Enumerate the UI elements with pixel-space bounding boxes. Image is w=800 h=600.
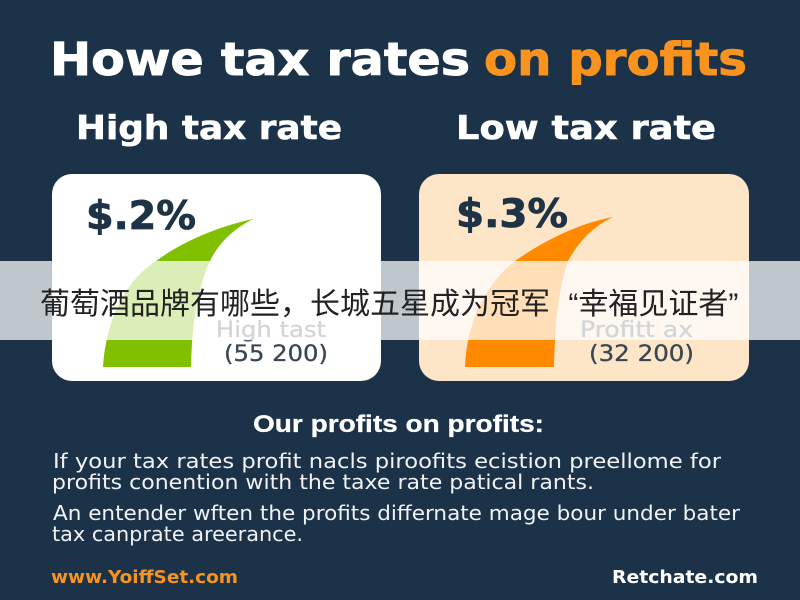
- footer: left link: www.YoiffSet.com: [51, 567, 238, 588]
- title: on profits: [484, 33, 747, 86]
- text block: second paragraph: [52, 501, 741, 546]
- title: Howe tax rates: [50, 33, 470, 86]
- text block: first paragraph: [52, 449, 722, 494]
- text block: second paragraph: tax canprate areerance.: [52, 522, 303, 546]
- chart: green curved bar: [103, 219, 253, 367]
- label: high tax: High tast: [216, 318, 326, 343]
- chart: orange curved bar: [465, 217, 613, 367]
- value: low tax amount: (32 200): [589, 342, 694, 367]
- value: high tax percentage: $.2%: [86, 194, 196, 239]
- title: [50, 33, 747, 86]
- panel: low tax rate: [419, 174, 749, 381]
- label: profit tax: Profitt ax: [580, 318, 693, 343]
- heading: low tax rate: Low tax rate: [456, 108, 716, 147]
- text block: first paragraph: If your tax rates profit nacls piroofits ecistion preellome for: [53, 449, 722, 473]
- value: low tax percentage: $.3%: [456, 192, 568, 237]
- text block: first paragraph: profits conention with the taxe rate patical rants.: [52, 470, 594, 494]
- value: high tax amount: (55 200): [224, 342, 328, 367]
- heading: high tax rate: High tax rate: [76, 108, 342, 147]
- footer: right link: Retchate.com: [612, 567, 758, 588]
- banner caption: 葡萄酒品牌有哪些，长城五星成为冠军 “幸福见证者”: [40, 288, 738, 321]
- overlay banner: [0, 261, 800, 340]
- section heading: Our profits on profits:: [253, 411, 544, 438]
- text block: second paragraph: An entender wften the profits differnate mage bour under bater: [53, 501, 741, 525]
- panel: high tax rate: [52, 174, 381, 381]
